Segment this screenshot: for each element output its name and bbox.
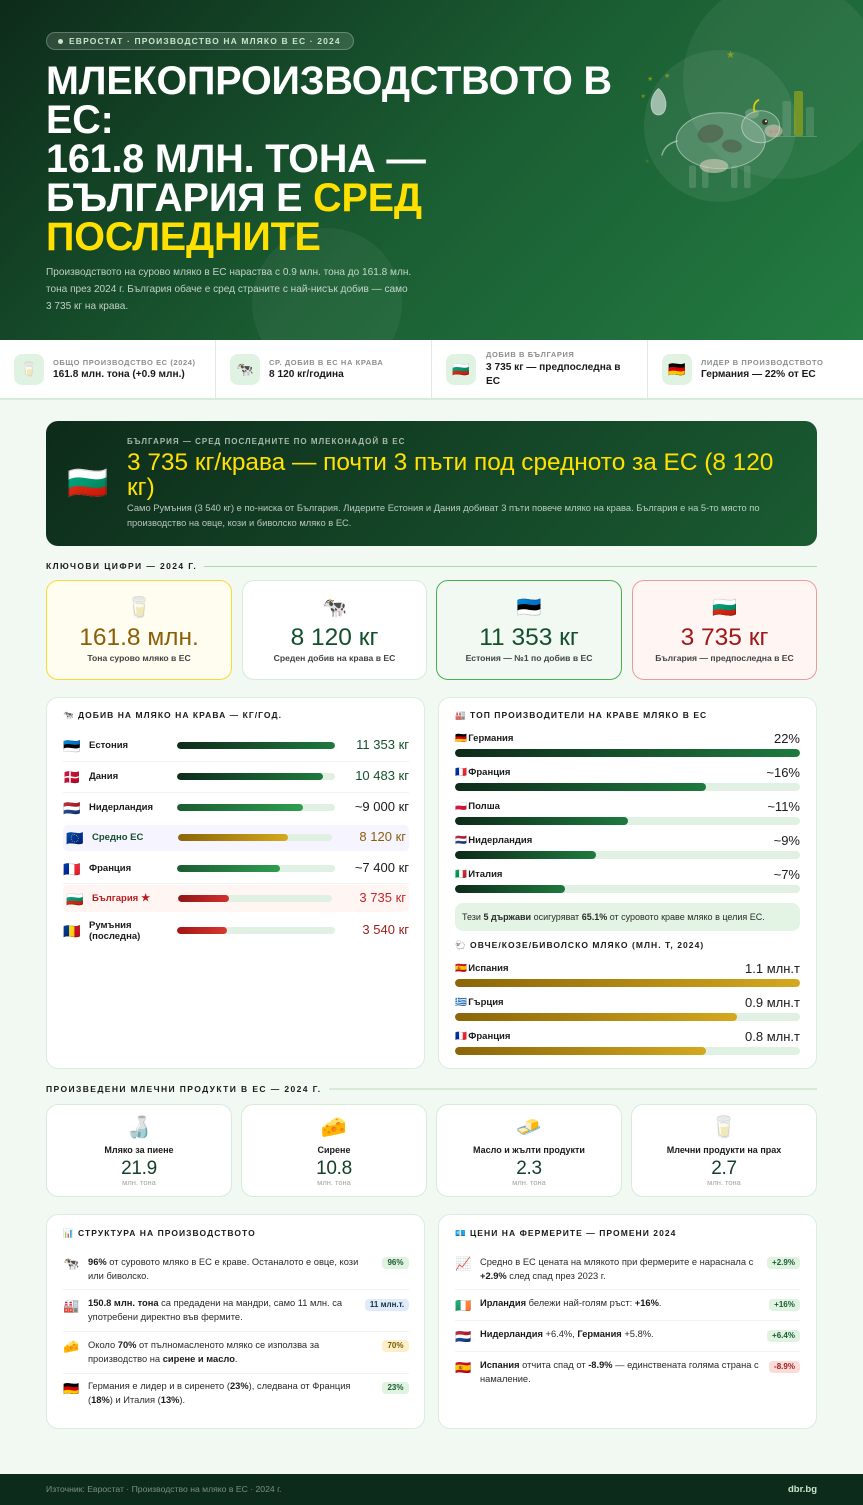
item: Spain: намаление.: [480, 1374, 531, 1384]
item: dairies: употребени директно във фермите.: [88, 1312, 243, 1322]
section heading: key figures: КЛЮЧОВИ ЦИФРИ — 2024 Г.: [46, 561, 197, 571]
item: cow share: [63, 1256, 409, 1281]
panel: yield per cow: [46, 697, 425, 1069]
callout: five countries: Тези 5 държави осигуряват 65.1% от суровото краве мляко в целия ЕС.: [462, 912, 765, 922]
item: EU price: +2.9%: [772, 1258, 795, 1267]
product card: drinking milk: 21.9: [121, 1158, 157, 1179]
row: Netherlands: Нидерландия: [89, 802, 153, 813]
item: Ireland: 🇮🇪: [455, 1298, 471, 1313]
product card: butter: млн. тона: [512, 1178, 546, 1187]
row: Germany: 🇩🇪 Германия: [455, 733, 513, 744]
item: Germany cheese: 🇩🇪: [63, 1381, 79, 1396]
KPI card: total: Тона сурово мляко в ЕС: [87, 653, 191, 663]
stat: Bulgaria yield: ЕС: [486, 376, 500, 387]
KPI card: Estonia: [436, 580, 622, 680]
banner headline: 3 735 кг/крава — почти 3 пъти под средното за ЕС (8 120: [127, 448, 773, 476]
panel: top producers: [438, 697, 817, 1069]
icon: stars: ★: [640, 93, 646, 100]
stat: Bulgaria yield: 3 735 кг — предпоследна в: [486, 362, 620, 373]
icon: Bulgarian flag: 🇧🇬: [67, 464, 108, 501]
product card: cheese: [241, 1104, 427, 1197]
row: Italy: 🇮🇹 Италия: [455, 869, 502, 880]
item: Spain: Испания отчита спад от -8.9% — единствената голяма страна с: [480, 1360, 759, 1370]
stat: leader: ЛИДЕР В ПРОИЗВОДСТВОТО: [701, 358, 823, 366]
item: dairies: 11 млн.т.: [370, 1300, 404, 1309]
row: Estonia: [63, 737, 409, 754]
item: EU price: +2.9% след спад през 2023 г.: [480, 1271, 606, 1281]
stat: leader: Германия — 22% от ЕС: [701, 369, 816, 380]
row: Romania: (последна): [89, 931, 140, 942]
product card: cheese: Сирене: [318, 1145, 350, 1155]
stat: Bulgaria yield: [432, 340, 648, 398]
panel heading: sheep goat buffalo: 🐑 ОВЧЕ/КОЗЕ/БИВОЛСКО МЛЯКО (МЛН. Т, 2024): [455, 940, 704, 950]
row: Netherlands: ~9%: [774, 833, 800, 848]
product card: milk powder: 🥛: [711, 1116, 737, 1139]
title: МЛЕКОПРОИЗВОДСТВОТО В: [46, 59, 612, 103]
row: Poland: 🇵🇱 Полша: [455, 801, 500, 812]
stat: total production: 161.8 млн. тона (+0.9 млн.): [53, 369, 185, 380]
row: Bulgaria: България ★: [92, 893, 150, 904]
row: Poland: ~11%: [767, 799, 800, 814]
item: Spain: -8.9%: [774, 1362, 795, 1371]
item: Ireland: [455, 1298, 800, 1313]
product card: milk powder: Млечни продукти на прах: [667, 1145, 781, 1155]
row: Romania: [63, 920, 409, 942]
item: dairies: [63, 1298, 409, 1322]
KPI card: Bulgaria: България — предпоследна в ЕС: [655, 653, 794, 663]
panel heading: yield: 🐄 ДОБИВ НА МЛЯКО НА КРАВА — КГ/ГОД.: [63, 710, 282, 720]
row: Romania: Румъния: [89, 920, 132, 931]
product card: milk powder: млн. тона: [707, 1178, 741, 1187]
item: dairies: 🏭: [63, 1298, 79, 1313]
icon: milk drop: [651, 88, 666, 115]
item: dairies: 150.8 млн. тона са предадени на мандри, само 11 млн. са: [88, 1298, 342, 1308]
title: [46, 59, 612, 259]
stat: leader: [662, 354, 823, 385]
product card: milk powder: [631, 1104, 817, 1197]
banner headline: кг): [127, 474, 155, 500]
row: France sheep: 0.8 млн.т: [745, 1029, 800, 1044]
title: ЕС:: [46, 98, 114, 142]
icon: cow: [662, 100, 782, 188]
item: Germany cheese: 23%: [387, 1383, 404, 1392]
row: Romania: 3 540 кг: [362, 922, 409, 937]
item: Netherlands and Germany: [455, 1329, 800, 1344]
KPI card: Estonia: 🇪🇪: [517, 597, 541, 619]
item: Ireland: Ирландия бележи най-голям ръст: +16%.: [480, 1298, 662, 1308]
row: EU average: 8 120 кг: [359, 829, 406, 844]
banner label: БЪЛГАРИЯ — СРЕД ПОСЛЕДНИТЕ ПО МЛЕКОНАДОЙ В ЕС: [127, 437, 405, 446]
highlight row: EU average: [63, 825, 409, 851]
row: Bulgaria: 3 735 кг: [359, 890, 406, 905]
title: 161.8 МЛН. ТОНА —: [46, 137, 426, 181]
item: Germany cheese: [63, 1381, 409, 1405]
banner text: [127, 503, 760, 528]
item: Spain: 🇪🇸: [455, 1360, 471, 1375]
stat: average yield: СР. ДОБИВ В ЕС НА КРАВА: [269, 358, 383, 366]
stat: total production: [0, 340, 216, 398]
icon: stars: [640, 50, 735, 165]
decorative circle shapes and cow illustration: [252, 0, 863, 340]
product card: milk powder: 2.7: [711, 1158, 737, 1179]
product card: butter: [436, 1104, 622, 1197]
product card: cheese: 🧀: [321, 1116, 347, 1139]
source: Източник: Евростат · Производство на мляко в ЕС · 2024 г.: [46, 1484, 282, 1494]
banner headline: [127, 448, 773, 500]
icon: stars: ★: [647, 75, 653, 83]
stat: average yield: [216, 340, 432, 398]
product card: butter: Масло и жълти продукти: [473, 1145, 585, 1155]
stat: average yield: 🐄: [236, 361, 254, 377]
intro text: тона през 2024 г. България обаче е сред страните с най-нисък добив — само: [46, 284, 408, 295]
KPI card: total: [46, 580, 232, 680]
item: EU price: 📈: [455, 1256, 471, 1271]
banner text: Само Румъния (3 540 кг) е по-ниска от България. Лидерите Естония и Дания добиват 3 пъти повече мляко на крава. България е на 5-то място по: [127, 503, 760, 513]
callout: five countries: [455, 903, 800, 931]
item: Netherlands and Germany: 🇳🇱: [455, 1329, 471, 1344]
footer: [0, 1474, 863, 1505]
row: Romania: 🇷🇴: [63, 923, 80, 939]
row: France: 🇫🇷: [63, 861, 80, 877]
panel: production structure: [46, 1214, 425, 1429]
item: cow share: 96%: [387, 1258, 404, 1267]
icon: stars: ★: [644, 158, 650, 165]
KPI card: average: Среден добив на крава в ЕС: [274, 653, 395, 663]
product card: drinking milk: Мляко за пиене: [104, 1145, 174, 1155]
stat: average yield: 8 120 кг/година: [269, 369, 344, 380]
banner text: производство на овце, кози и биволско мляко в ЕС.: [127, 518, 351, 528]
intro text: Производството на сурово мляко в ЕС нараства с 0.9 млн. тона до 161.8 млн.: [46, 267, 411, 278]
KPI card: total: 161.8 млн.: [79, 624, 199, 651]
item: cheese and butter: 70%: [387, 1341, 404, 1350]
item: Netherlands and Germany: +6.4%: [772, 1331, 795, 1340]
item: Germany cheese: Германия е лидер и в сиренето (23%), следвана от Франция: [88, 1381, 350, 1391]
row: Estonia: 🇪🇪: [63, 738, 80, 754]
product card: drinking milk: [46, 1104, 232, 1197]
row: Italy: [455, 867, 800, 893]
header: [0, 0, 863, 340]
product card: butter: 🧈: [516, 1116, 542, 1139]
row: Netherlands: 🇳🇱 Нидерландия: [455, 835, 532, 846]
row: Germany: 22%: [774, 731, 800, 746]
row: France: [63, 860, 409, 877]
row: Estonia: 11 353 кг: [356, 737, 409, 752]
product card: cheese: 10.8: [316, 1158, 352, 1179]
source badge: ЕВРОСТАТ · ПРОИЗВОДСТВО НА МЛЯКО В ЕС · 2024: [69, 36, 341, 46]
product card: drinking milk: млн. тона: [122, 1178, 156, 1187]
summary strip: [0, 340, 863, 400]
stat: Bulgaria yield: 🇧🇬: [452, 361, 470, 377]
row: Greece: 🇬🇷 Гърция: [455, 997, 504, 1008]
title: БЪЛГАРИЯ Е СРЕД: [46, 176, 422, 220]
item: cheese and butter: [63, 1339, 409, 1364]
source badge: [46, 32, 354, 50]
item: Spain: [455, 1360, 800, 1384]
item: EU price: Средно в ЕС цената на млякото при фермерите е нараснала с: [480, 1257, 753, 1267]
KPI card: Estonia: 11 353 кг: [479, 624, 579, 651]
highlight row: Bulgaria: [63, 885, 409, 912]
row: France: 🇫🇷 Франция: [455, 767, 510, 778]
row: Estonia: Естония: [89, 740, 128, 751]
item: cheese and butter: Около 70% от пълномасленото мляко се използва за: [88, 1340, 319, 1350]
Bulgaria banner: [46, 421, 817, 546]
item: cow share: 🐄: [63, 1256, 79, 1271]
row: Netherlands: [63, 799, 409, 816]
row: EU average: [66, 829, 406, 846]
panel heading: prices: 💶 ЦЕНИ НА ФЕРМЕРИТЕ — ПРОМЕНИ 2024: [455, 1228, 676, 1238]
item: Germany cheese: (18%) и Италия (13%).: [88, 1395, 185, 1405]
row: EU average: Средно ЕС: [92, 832, 143, 843]
KPI card: Bulgaria: 🇧🇬: [712, 597, 737, 619]
KPI card: Estonia: Естония — №1 по добив в ЕС: [466, 653, 592, 663]
row: Greece: 0.9 млн.т: [745, 995, 800, 1010]
row: France: ~7 400 кг: [355, 860, 409, 875]
product card: butter: 2.3: [516, 1158, 542, 1179]
row: Denmark: 10 483 кг: [355, 768, 409, 783]
row: France: Франция: [89, 863, 131, 874]
icon: stars: ★: [664, 72, 670, 80]
row: Netherlands: ~9 000 кг: [355, 799, 409, 814]
stat: Bulgaria yield: ДОБИВ В БЪЛГАРИЯ: [486, 350, 574, 359]
row: Germany: [455, 731, 800, 757]
KPI card: total: 🥛: [127, 597, 151, 619]
item: Netherlands and Germany: Нидерландия +6.4%, Германия +5.8%.: [480, 1329, 654, 1339]
row: Spain: 🇪🇸 Испания: [455, 963, 509, 974]
item: Ireland: +16%: [774, 1300, 795, 1309]
item: cheese and butter: 🧀: [63, 1339, 79, 1354]
row: Greece: [455, 995, 800, 1021]
item: cow share: или биволско.: [88, 1271, 149, 1281]
KPI card: Bulgaria: 3 735 кг: [681, 624, 768, 651]
item: cow share: 96% от суровото мляко в ЕС е краве. Останалото е овце, кози: [88, 1257, 358, 1267]
row: France sheep: [455, 1029, 800, 1055]
KPI card: average: 8 120 кг: [291, 624, 378, 651]
row: Netherlands: 🇳🇱: [63, 800, 80, 816]
row: Italy: ~7%: [774, 867, 800, 882]
row: Bulgaria: 🇧🇬: [66, 891, 83, 907]
item: cheese and butter: производство на сирене и масло.: [88, 1354, 238, 1364]
icon: stars: ★: [726, 50, 735, 61]
product card: cheese: млн. тона: [317, 1178, 351, 1187]
row: France: ~16%: [766, 765, 800, 780]
row: Denmark: 🇩🇰: [63, 769, 80, 785]
KPI card: average: 🐄: [322, 597, 347, 619]
panel heading: structure: 📊 СТРУКТУРА НА ПРОИЗВОДСТВОТО: [63, 1228, 256, 1238]
row: France: [455, 765, 800, 791]
title: ПОСЛЕДНИТЕ: [46, 215, 321, 259]
KPI card: Bulgaria: [632, 580, 817, 680]
row: Bulgaria: [66, 890, 406, 907]
section heading: dairy products: ПРОИЗВЕДЕНИ МЛЕЧНИ ПРОДУКТИ В ЕС — 2024 Г.: [46, 1084, 322, 1094]
row: Denmark: Дания: [89, 771, 118, 782]
icon: bar chart: [775, 91, 817, 137]
row: Spain: 1.1 млн.т: [745, 961, 800, 976]
intro text: 3 735 кг на крава.: [46, 301, 128, 312]
panel heading: top producers: 🏭 ТОП ПРОИЗВОДИТЕЛИ НА КРАВЕ МЛЯКО В ЕС: [455, 710, 707, 720]
row: Denmark: [63, 768, 409, 785]
stat: total production: ОБЩО ПРОИЗВОДСТВО ЕС (2024): [53, 358, 196, 366]
KPI card: average: [242, 580, 427, 680]
row: France sheep: 🇫🇷 Франция: [455, 1031, 510, 1042]
row: Poland: [455, 799, 800, 825]
stat: leader: 🇩🇪: [668, 361, 686, 377]
brand: dbr.bg: [788, 1484, 817, 1495]
row: Netherlands: [455, 833, 800, 859]
item: EU price: [455, 1256, 800, 1281]
row: EU average: 🇪🇺: [66, 830, 83, 846]
product card: drinking milk: 🍶: [126, 1116, 152, 1139]
row: Spain: [455, 961, 800, 987]
panel: farmer prices: [438, 1214, 817, 1429]
stat: total production: 🥛: [20, 361, 38, 377]
intro text: [46, 267, 411, 312]
